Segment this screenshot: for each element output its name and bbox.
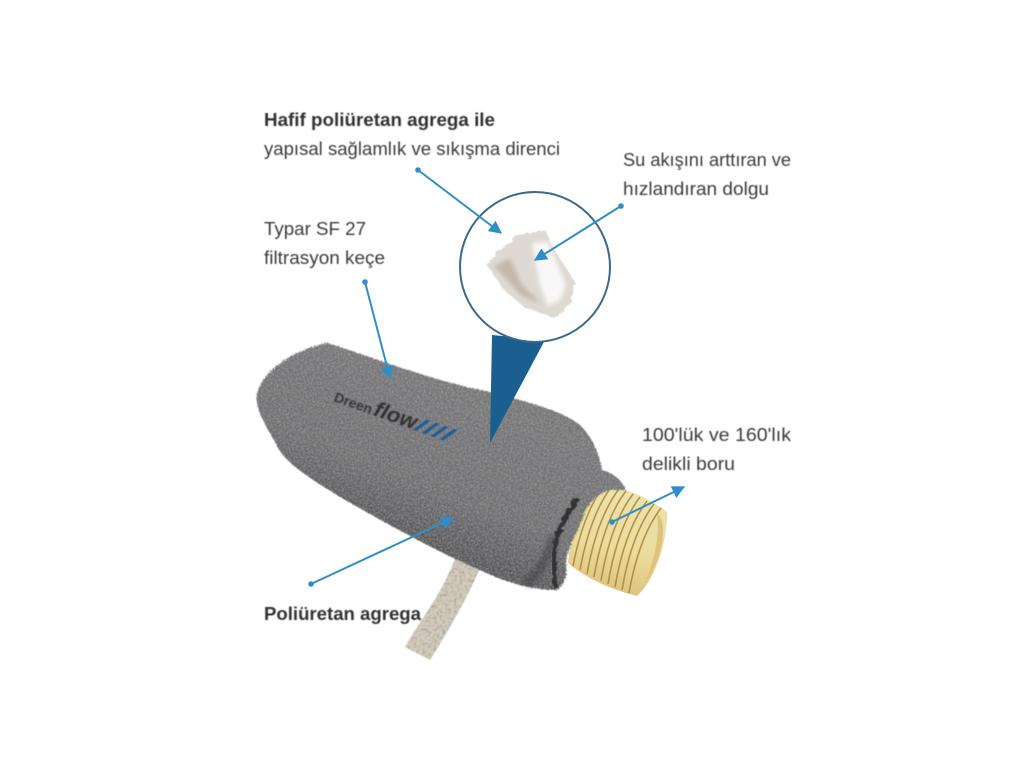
text: pipe caption: delikli boru xyxy=(642,453,735,474)
text: water flow caption: hızlandıran dolgu xyxy=(623,178,769,199)
strip: polyurethane aggregate band xyxy=(405,553,483,660)
text: filter felt caption: Typar SF 27 xyxy=(264,218,366,239)
text: polyurethane aggregate caption: Poliüretan agrega xyxy=(264,603,422,624)
text: filter felt caption xyxy=(264,218,385,268)
magnifier circle xyxy=(460,192,610,342)
filter sock: grey Typar felt body xyxy=(257,343,626,590)
logo: Drenflow on sock: Dreen xyxy=(332,389,375,417)
pipe: perforated ribbed pipe xyxy=(568,482,667,596)
text: water flow caption xyxy=(623,149,791,199)
text: pipe caption xyxy=(642,424,792,474)
logo: Drenflow on sock: //// xyxy=(411,414,458,448)
text: lightweight aggregate caption: yapısal sağlamlık ve sıkışma direnci xyxy=(264,138,560,159)
arrow: polyurethane aggregate label to sock xyxy=(308,518,453,587)
text: filter felt caption: filtrasyon keçe xyxy=(264,247,385,268)
text: pipe caption: 100'lük ve 160'lık xyxy=(642,424,792,445)
logo: Drenflow on sock xyxy=(331,384,459,448)
arrow: aggregate label to fragment xyxy=(415,167,501,233)
text: water flow caption: Su akışını arttıran ve xyxy=(623,149,791,170)
text: lightweight aggregate caption: Hafif poliüretan agrega ile xyxy=(264,109,495,130)
aggregate fragment xyxy=(487,230,575,318)
logo: Drenflow on sock: flow xyxy=(371,398,422,435)
arrow: felt label to sock xyxy=(362,279,390,378)
pointer: blue wedge from magnifier to sock xyxy=(490,335,545,443)
arrow: pipe label to pipe xyxy=(609,487,684,525)
text: lightweight aggregate caption xyxy=(264,109,560,159)
arrow: fill label to fragment xyxy=(535,203,624,260)
